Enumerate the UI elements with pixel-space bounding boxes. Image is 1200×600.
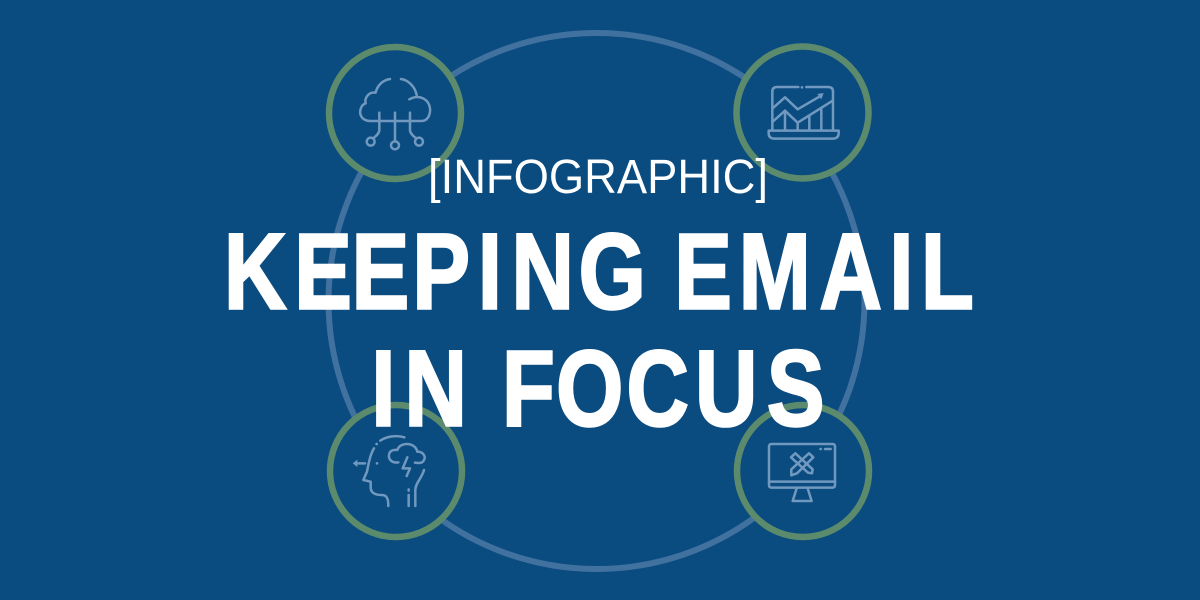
icon: laptop with chart — [769, 86, 839, 139]
icon badge: cloud network — [329, 47, 461, 179]
title line 2: IN FOCUS — [371, 327, 825, 449]
large ring — [328, 33, 864, 569]
title line 1: KEEPING EMAIL — [224, 210, 974, 332]
icon badge: laptop chart — [736, 46, 868, 178]
icon badge: head with storm cloud — [330, 405, 462, 537]
icon badge: monitor with tools — [737, 405, 869, 537]
icon: cloud — [360, 79, 430, 149]
title — [224, 210, 974, 449]
icon: monitor with crossed tools — [769, 444, 835, 501]
icon: head with storm cloud — [353, 436, 425, 506]
label: [INFOGRAPHIC]: [INFOGRAPHIC] — [428, 151, 768, 204]
